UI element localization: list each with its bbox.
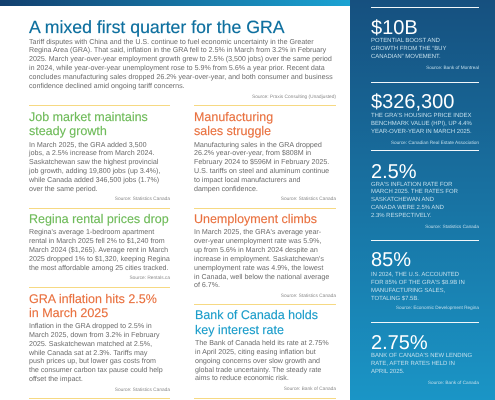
text: bank of canada: The Bank of Canada held its rate at 2.75%	[195, 339, 329, 347]
stat: 2.5%: 2.5%	[371, 161, 417, 183]
text: unemployment: over-year unemployment rate was 5.9%,	[194, 237, 321, 245]
stat text: 2.5%: CANADA WERE 2.5% AND	[371, 205, 444, 211]
source: bank of canada: Source: Bank of Canada	[284, 386, 336, 392]
heading: inflation: GRA inflation hits 2.5%	[29, 292, 157, 306]
heading: inflation: in March 2025	[29, 306, 108, 320]
source: manufacturing: Source: Statistics Canada	[281, 197, 336, 202]
text: inflation: the consumer carbon tax pause could help	[29, 366, 163, 374]
stat: $326,300: $326,300	[371, 91, 454, 113]
text: job market: while Canada added 346,500 jobs (1.7%)	[29, 176, 159, 184]
text: unemployment: In March 2025, the GRA's average year-	[194, 228, 321, 236]
stat text: $326,300: THE GRA'S HOUSING PRICE INDEX	[371, 113, 471, 119]
text: inflation: 2025. Saskatchewan matched at 2.5%,	[29, 340, 152, 348]
stat text: 2.75%	[371, 352, 472, 375]
text: job market: job growth, adding 19,800 jobs (up 3.4%),	[29, 167, 160, 175]
divider	[194, 398, 336, 399]
title: A mixed first quarter for the GRA	[29, 16, 285, 36]
intro text: in 2024, while year-over-year unemployment rose to 5.9% from 5.6% a year prior. Recent data	[29, 64, 325, 72]
stat text: $326,300: BENCHMARK VALUE (HPI), UP 4.4%	[371, 121, 472, 127]
heading: job market: steady growth	[29, 124, 107, 138]
intro text: 2025. March year-over-year employment growth grew to 2.5% (3,500 jobs) over the same period	[29, 55, 332, 63]
intro text: confidence declined amid ongoing tariff concerns.	[29, 82, 185, 90]
heading: unemployment: Unemployment climbs	[194, 212, 317, 226]
text: bank of canada	[195, 339, 329, 382]
stat text: $10B: POTENTIAL BOOST AND	[371, 38, 440, 44]
text: job market: over the same period.	[29, 185, 98, 193]
text: bank of canada: aims to reduce economic risk.	[195, 374, 289, 382]
heading: bank of canada: Bank of Canada holds	[195, 308, 318, 322]
source: 2.75%: Source: Bank of Canada	[428, 380, 479, 384]
heading: manufacturing	[194, 110, 273, 138]
stat text: 2.75%: BANK OF CANADA'S NEW LENDING	[371, 353, 472, 359]
text: inflation	[29, 322, 163, 383]
text: unemployment: increase in employment. Saskatchewan's	[194, 255, 324, 263]
stat text: 2.5%: MARCH 2025. THE RATES FOR	[371, 189, 458, 195]
stat text: 2.5%	[371, 182, 458, 219]
source: rental prices: Source: Rentals.ca	[129, 276, 170, 281]
source: $326,300: Source: Canadian Real Estate Association	[391, 140, 479, 145]
panel: key statistics sidebar	[350, 0, 495, 400]
stat text: 85%: FOR 85% OF THE GRA'S $8.9B IN	[371, 280, 465, 286]
stat text: 85%: MANUFACTURING SALES,	[371, 288, 445, 294]
text: manufacturing: dampen confidence.	[194, 185, 258, 193]
text: manufacturing	[194, 140, 329, 193]
stat text: 85%	[371, 272, 465, 302]
stat: $10B: $10B	[371, 17, 418, 39]
heading: job market: Job market maintains	[29, 110, 148, 124]
divider	[194, 208, 336, 209]
stat text: 85%: IN 2024, THE U.S. ACCOUNTED	[371, 272, 459, 278]
heading: manufacturing: Manufacturing	[194, 110, 273, 124]
heading: bank of canada	[195, 308, 318, 337]
text: rental prices: the most affordable among 25 cities tracked.	[29, 264, 168, 272]
divider	[194, 304, 336, 305]
text: bank of canada: in April 2025, citing easing inflation but	[195, 348, 316, 356]
stat text: $326,300	[371, 112, 472, 135]
text: unemployment: in Canada, well below the national average	[194, 273, 329, 281]
source: 85%: Source: Economic Development Regina	[396, 305, 479, 310]
intro text	[29, 38, 333, 90]
divider	[29, 208, 170, 209]
divider	[194, 105, 336, 106]
intro source: Source: Praxis Consulting (Unadjusted)	[252, 94, 336, 100]
text: unemployment: of 6.7%.	[194, 281, 220, 289]
heading: inflation	[29, 292, 157, 320]
text: inflation: March 2025, down from 3.2% in February	[29, 331, 160, 339]
stat text: $10B: GROWTH FROM THE “BUY	[371, 46, 446, 52]
text: inflation: push prices up, but lower gas costs from	[29, 357, 156, 365]
text: manufacturing: February 2024 to $596M in February 2025.	[194, 158, 329, 166]
text: job market: Saskatchewan saw the highest provincial	[29, 158, 158, 166]
text: bank of canada: ongoing concerns over slow growth and	[195, 357, 320, 365]
text: inflation: offset the impact.	[29, 375, 83, 383]
heading: bank of canada: key interest rate	[195, 323, 284, 337]
top gradient bar	[0, 0, 350, 6]
stat: 2.75%: 2.75%	[371, 332, 428, 354]
text: job market: In March 2025, the GRA added 3,500	[29, 140, 147, 148]
text: manufacturing: 26.2% year-over-year, from $808M in	[194, 149, 311, 157]
divider	[29, 286, 170, 288]
intro text: concludes manufacturing sales dropped 26.2% year-over-year, and both consumer and business	[29, 73, 333, 81]
text: rental prices: 2025 dropped 1% to $1,320, keeping Regina	[29, 255, 170, 263]
stat text: 2.75%: RATE, AFTER RATES HELD IN	[371, 361, 455, 367]
text: manufacturing: to impact local manufacturers and	[194, 176, 300, 184]
stat text: 85%: TOTALING $7.5B.	[371, 296, 419, 302]
stat text: 2.5%: GRA'S INFLATION RATE FOR	[371, 182, 452, 188]
divider	[29, 105, 170, 106]
text: unemployment: up from 5.6% in March 2024 despite an	[194, 246, 318, 254]
text: unemployment	[194, 228, 329, 289]
stat text: 2.5%: SASKATCHEWAN AND	[371, 197, 434, 203]
intro text: Regina Area (GRA). That said, inflation in the GRA fell to 2.5% in March from 3.2% in February	[29, 46, 326, 54]
stat text: 2.75%: APRIL 2025.	[371, 369, 404, 375]
text: manufacturing: Manufacturing sales in the GRA dropped	[194, 140, 322, 148]
divider	[29, 398, 170, 399]
stat text: 2.5%: 2.3% RESPECTIVELY.	[371, 213, 432, 219]
source: job market: Source: Statistics Canada	[115, 197, 170, 202]
text: unemployment: unemployment rate was 4.9%, the lowest	[194, 264, 323, 272]
stat text: $326,300: YEAR-OVER-YEAR IN MARCH 2025.	[371, 129, 472, 135]
text: manufacturing: U.S. tariffs on steel and aluminum continue	[194, 167, 329, 175]
heading: job market	[29, 110, 148, 138]
stat text: $10B	[371, 38, 446, 60]
text: rental prices: Regina's average 1-bedroom apartment	[29, 228, 154, 236]
text: bank of canada: global trade uncertainty. The steady rate	[195, 366, 321, 374]
source: 2.5%: Source: Statistics Canada	[425, 224, 479, 228]
text: rental prices	[29, 228, 170, 272]
heading: rental prices: Regina rental prices drop	[29, 212, 169, 226]
text: job market	[28, 140, 160, 193]
source: inflation: Source: Statistics Canada	[115, 388, 170, 392]
source: $10B: Source: Bank of Montreal	[426, 64, 479, 70]
text: inflation: Inflation in the GRA dropped to 2.5% in	[29, 322, 152, 330]
text: rental prices: rental in March 2025 fell 2% to $1,240 from	[29, 237, 165, 245]
text: job market: jobs, a 2.5% increase from March 2024.	[29, 149, 154, 157]
intro text: Tariff disputes with China and the U.S. continue to fuel economic uncertainty in the Greater	[29, 38, 314, 46]
stat: 85%: 85%	[371, 249, 411, 271]
heading: manufacturing: sales struggle	[194, 124, 271, 138]
text: inflation: while Canada sat at 2.3%. Tariffs may	[29, 349, 147, 357]
text: rental prices: March 2024 ($1,265). Average rent in March	[29, 246, 168, 254]
source: unemployment: Source: Statistics Canada	[281, 294, 336, 298]
stat text: $10B: CANADIAN” MOVEMENT.	[371, 54, 441, 60]
